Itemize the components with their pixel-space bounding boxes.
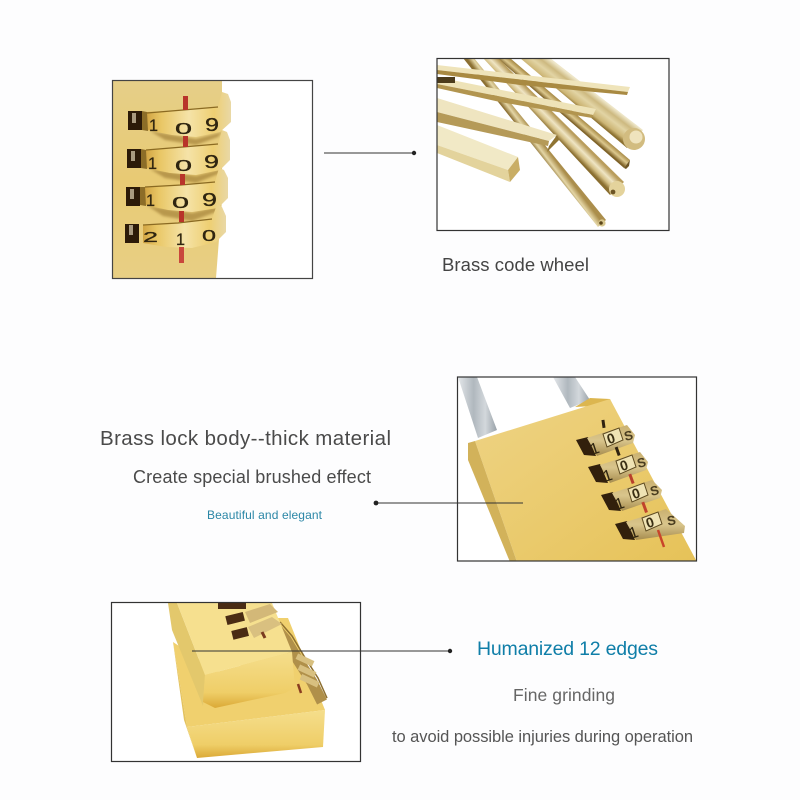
arrow: code wheel leader line bbox=[324, 151, 416, 155]
text: beautiful and elegant: Beautiful and elegant bbox=[207, 508, 323, 522]
dial row 2: S bbox=[635, 454, 648, 471]
text: fine grinding: Fine grinding bbox=[513, 685, 615, 705]
lock body face bbox=[468, 398, 697, 562]
upper lock bbox=[168, 603, 295, 708]
code wheel 4: 1 bbox=[176, 230, 185, 249]
dial row 3 bbox=[601, 480, 662, 514]
lock body bbox=[113, 81, 222, 278]
dial row 2: 0 bbox=[618, 456, 630, 474]
round rod with end cap bbox=[483, 58, 625, 197]
flat bar 1 bbox=[437, 65, 630, 95]
lower lock bbox=[173, 618, 325, 758]
left shackle bar bbox=[458, 377, 497, 438]
panel: rounded edges bbox=[111, 602, 360, 762]
code wheel 2: 1 bbox=[148, 154, 157, 173]
code wheel 3 bbox=[126, 168, 228, 212]
text: avoid injuries: to avoid possible injuries during operation bbox=[392, 728, 693, 746]
code wheel 4: 2 bbox=[143, 229, 158, 246]
code wheel 3: 9 bbox=[202, 190, 217, 210]
code wheel 3: 0 bbox=[172, 195, 190, 212]
dial row 4: S bbox=[666, 512, 677, 529]
code wheel 1 bbox=[128, 92, 231, 138]
heading: brass lock body: Brass lock body--thick material bbox=[100, 427, 391, 450]
dial row 4: 1 bbox=[627, 524, 641, 543]
panel: brass code wheel close-up bbox=[112, 80, 313, 278]
heading: humanized 12 edges: Humanized 12 edges bbox=[477, 638, 658, 660]
dial row 1: 0 bbox=[605, 429, 617, 447]
panel: lock body bbox=[457, 377, 697, 562]
code wheel 1: 9 bbox=[205, 115, 219, 135]
code wheel 1: 0 bbox=[175, 121, 193, 138]
dial row 4 bbox=[615, 509, 685, 547]
code wheel 4 bbox=[125, 204, 226, 263]
dial row 2: 1 bbox=[601, 467, 615, 486]
dial row 1: 1 bbox=[588, 440, 602, 459]
rear dial strip bbox=[274, 622, 327, 702]
large round rod bbox=[520, 58, 645, 150]
arrow: lock body leader line bbox=[374, 501, 523, 505]
dial row 4: 0 bbox=[644, 513, 656, 531]
code wheel 1: 1 bbox=[149, 116, 158, 135]
dial row 1: S bbox=[622, 427, 635, 444]
arrow: edges leader line bbox=[192, 649, 452, 653]
code wheel 4: 0 bbox=[202, 228, 217, 245]
code wheel 2: 9 bbox=[204, 152, 219, 172]
medium round rod bbox=[497, 58, 630, 169]
dial slots bbox=[218, 603, 319, 693]
code wheel 3: 1 bbox=[146, 191, 155, 210]
panel: brass rods bbox=[437, 58, 669, 230]
caption: brass code wheel: Brass code wheel bbox=[442, 254, 589, 275]
dial row 2 bbox=[588, 452, 648, 486]
dial row 1 bbox=[576, 420, 635, 459]
dial row 3: S bbox=[648, 482, 661, 499]
thin round rod bbox=[463, 58, 606, 227]
flat bar 2 bbox=[437, 77, 596, 118]
text: brushed effect: Create special brushed effect bbox=[133, 467, 371, 487]
code wheel 2: 0 bbox=[175, 158, 193, 175]
square bar 4 bbox=[437, 125, 520, 182]
square bar 3 bbox=[437, 98, 559, 152]
dial row 3: 0 bbox=[630, 484, 642, 502]
right shackle bar bbox=[553, 377, 590, 408]
infographic canvas bbox=[102, 58, 698, 762]
wheel shadows bbox=[148, 131, 222, 221]
code wheel 2 bbox=[127, 130, 230, 175]
dial row 3: 1 bbox=[613, 495, 627, 514]
